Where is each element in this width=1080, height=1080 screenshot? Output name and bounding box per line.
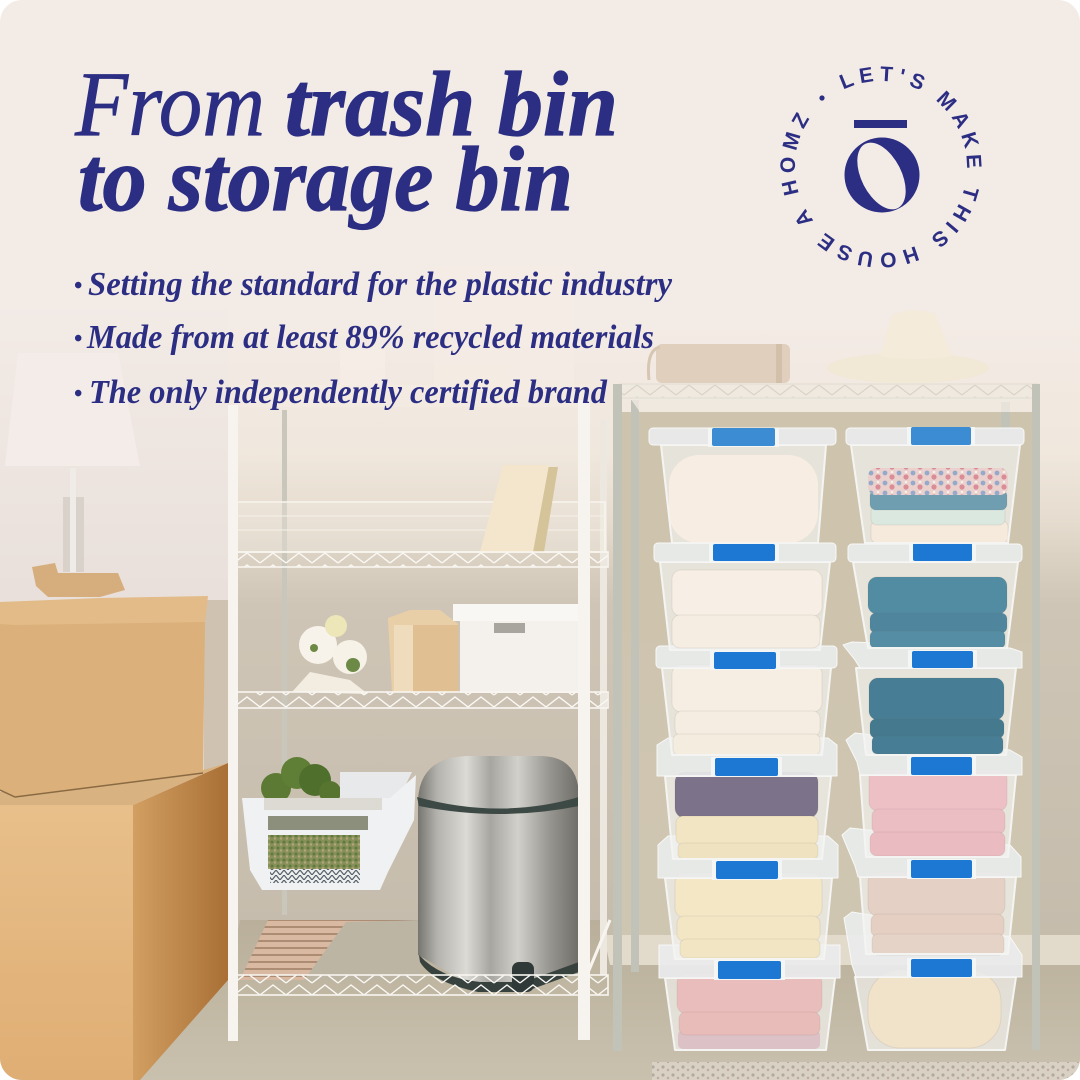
white wire shelving unit [228,400,610,1041]
bin: purple and yellow stack [657,738,837,859]
front posts [228,405,238,1041]
lower box front [0,805,133,1080]
bag on top shelf [648,344,790,383]
front rack posts [613,384,622,1051]
bin: teal stack [848,543,1022,648]
white laundry basket [242,772,416,890]
upper box lid [0,596,208,625]
logo badge [780,66,982,268]
rug [652,1062,1080,1080]
bullet list: • [74,326,82,352]
upper box body [0,622,205,797]
rear rack posts [631,400,639,972]
bin: cream stack [654,543,836,650]
lower box top [0,763,228,805]
lower box side [133,763,228,1080]
book stack [480,465,558,552]
metal rack with storage bins [613,310,1040,1051]
stacked cardboard boxes [0,596,228,1080]
bin: yellow stack [658,836,838,959]
top basket shelf [237,502,605,552]
bullet list: Made from at least 89% recycled materials [86,319,654,356]
bullet list: The only independently certified brand [89,374,608,411]
top shelf [620,384,1040,412]
cardboard parcel [388,610,458,692]
white lidded box [453,604,578,693]
upper box bottom edge [0,773,203,797]
bin: floral and teal stack [846,427,1024,543]
floor [138,920,1080,1080]
stainless steel pedal bin [417,756,579,992]
heading [74,53,618,230]
heading: trash bin [285,53,618,155]
plant [261,757,341,803]
bin: pink stack bottom [659,945,840,1050]
flowers [292,615,368,694]
faded background shelf items [235,266,585,407]
bin: pink stack [846,733,1022,857]
bottom shelf mat [240,920,420,980]
bin: rolled blanket [844,912,1022,1050]
bin: cream stack three [656,646,837,755]
baseboard [590,935,1080,965]
darker wall behind storage rack [622,412,1037,937]
circular slogan: LET'S MAKE THIS HOUSE A HOMZ [780,66,982,268]
straw hat on top shelf [827,310,989,383]
rear posts [282,410,287,915]
pale wall on the left [0,300,228,940]
bin: cream pillow [649,428,836,543]
upper box shadow [204,600,228,775]
table lamp [5,353,140,597]
heading: From [74,53,265,155]
bin: dark teal stack [843,642,1022,755]
bullet list: Setting the standard for the plastic industry [88,266,673,303]
bullet list [74,266,673,411]
bullet list: • [74,381,82,407]
heading: to storage bin [78,128,573,230]
bin: dusty rose stack [842,828,1021,955]
bullet list: • [74,273,82,299]
